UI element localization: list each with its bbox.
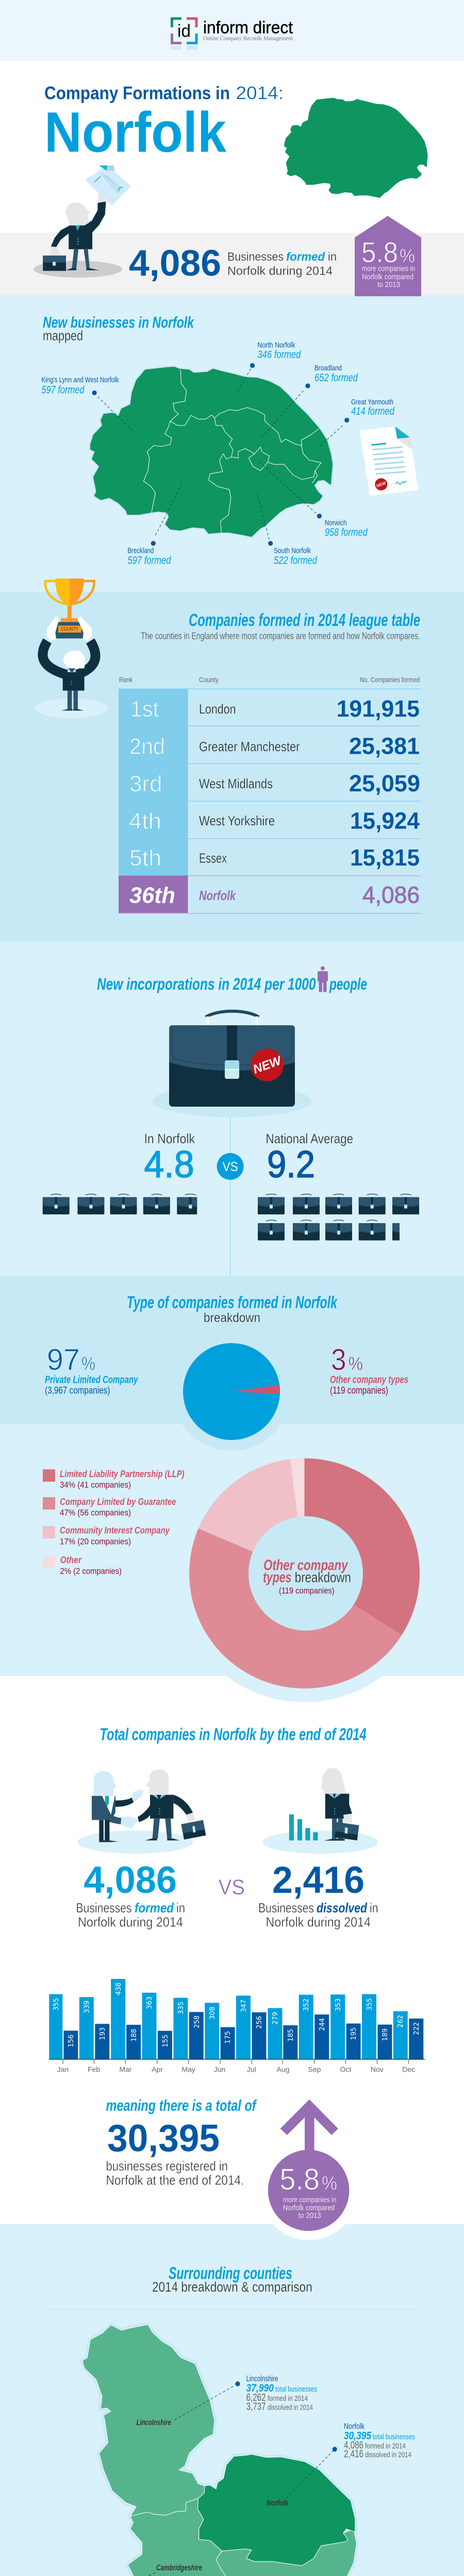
bar chart: monthly formed and dissolved: 352 [303, 1998, 310, 2011]
callout: 5.8% up arrow: 5.8 [279, 2163, 320, 2196]
bar chart: monthly formed and dissolved: 262 [397, 2015, 405, 2028]
heading: surrounding counties: 2014 breakdown & comparison [152, 2279, 312, 2295]
comparison: Norfolk vs national per 1000: In Norfolk [144, 1131, 195, 1146]
table: companies formed ranking: 1st [130, 697, 159, 722]
heading: total companies: Total companies in Norfolk by the end of 2014 [100, 1725, 367, 1743]
legend: other company types: 34% (41 companies) [60, 1480, 131, 1490]
bar chart: monthly formed and dissolved: 355 [366, 1998, 374, 2011]
heading: surrounding counties [41, 2263, 422, 2310]
bar chart: monthly formed and dissolved: 189 [382, 2028, 389, 2041]
heading: new incorporations per 1000 people [97, 967, 367, 993]
icon: large new briefcase [153, 1011, 311, 1276]
panel background: title [0, 61, 464, 233]
bar chart: monthly formed and dissolved: 256 [256, 2016, 263, 2029]
bar chart: monthly formed and dissolved: 244 [319, 2018, 326, 2031]
title block: Company Formations in [44, 83, 230, 104]
callout: 5.8% house: % [400, 245, 415, 266]
table: companies formed ranking: County [199, 675, 219, 684]
title block: 2014: [236, 83, 284, 104]
legend: other company types: Community Interest Company [60, 1526, 170, 1536]
heading: league table 1 [141, 611, 420, 641]
pie chart: company types [172, 1332, 291, 1451]
label: King's Lynn and West Norfolk: King's Lynn and West Norfolk [41, 376, 119, 384]
stat: total 30,395: meaning there is a total of [106, 2096, 257, 2114]
label: North Norfolk: North Norfolk [257, 342, 295, 350]
stat: 3% other types: Other company types [330, 1374, 408, 1385]
bar chart: monthly formed and dissolved: 353 [335, 1998, 342, 2011]
heading: new incorporations per 1000 people: people [329, 975, 367, 993]
callout: 5.8% house [355, 216, 421, 296]
stats: Norfolk: 30,395 [344, 2430, 371, 2442]
bar chart: monthly formed and dissolved: Jun [214, 2065, 225, 2074]
bar chart: monthly formed and dissolved: 188 [130, 2029, 138, 2042]
stat: formed versus dissolved: dissolved [317, 1900, 368, 1916]
bar chart: monthly formed and dissolved: 222 [413, 2022, 421, 2035]
panel background: header [0, 0, 464, 61]
bar chart: monthly formed and dissolved: Jul [247, 2065, 256, 2074]
table: companies formed ranking: West Midlands [199, 776, 273, 791]
legend: other company types: 47% (56 companies) [60, 1507, 131, 1518]
bar chart: monthly formed and dissolved: Dec [402, 2065, 415, 2074]
stat: formed versus dissolved: Businesses [76, 1900, 132, 1916]
bar chart: monthly formed and dissolved: Aug [277, 2065, 289, 2074]
stat: formed versus dissolved: in [370, 1900, 378, 1916]
stats: Lincolnshire: 37,990 [246, 2382, 274, 2394]
table: companies formed ranking: 36th [129, 883, 175, 908]
label: King's Lynn and West Norfolk [41, 376, 119, 396]
heading: type of companies: breakdown [204, 1311, 260, 1325]
panel background: surrounding counties [0, 2224, 464, 2576]
callout: 5.8% up arrow: more companies in [283, 2196, 337, 2204]
comparison: Norfolk vs national per 1000: 9.2 [267, 1144, 315, 1185]
stat: businesses formed: Norfolk during 2014 [227, 264, 333, 278]
bar chart: monthly formed and dissolved: 175 [224, 2031, 232, 2044]
callout: 5.8% house: Norfolk compared [362, 273, 413, 281]
label: South Norfolk [274, 547, 318, 566]
stat: formed versus dissolved: Businesses [258, 1900, 314, 1916]
callout: 5.8% house: to 2013 [377, 280, 400, 289]
table: companies formed ranking: West Yorkshire [199, 813, 275, 828]
comparison: Norfolk vs national per 1000: National Average [266, 1131, 353, 1146]
bar chart: monthly formed and dissolved: 355 [53, 1998, 60, 2011]
label: COUNTY plaque: COUNTY [61, 626, 78, 632]
stats: Lincolnshire [246, 2375, 317, 2412]
stat: businesses formed: 4,086 [129, 243, 221, 284]
legend: other company types: Other [60, 1555, 82, 1565]
stat: formed versus dissolved: 2,416 [272, 1859, 364, 1901]
icon: new document [359, 427, 418, 496]
table: companies formed ranking: 3rd [129, 771, 162, 796]
stat: 3% other types [330, 1343, 408, 1396]
legend: other company types: 2% (2 companies) [60, 1566, 122, 1576]
illustration: man with falling bar chart [263, 1768, 378, 1854]
bar chart: monthly formed and dissolved: 258 [193, 2015, 201, 2028]
stat: 97% private limited: 97 [47, 1343, 80, 1377]
label: Norwich: Norwich [325, 519, 347, 528]
map: Norfolk outline [284, 98, 428, 198]
label: Broadland: 652 formed [314, 372, 358, 384]
legend: other company types: Limited Liability Partnership (LLP) [60, 1469, 185, 1479]
heading: type of companies [127, 1293, 338, 1325]
illustration: man holding county trophy [35, 579, 108, 718]
stats: Lincolnshire: formed in 2014 [268, 2394, 308, 2403]
label: Great Yarmouth [351, 398, 395, 417]
bar chart: monthly formed and dissolved: 438 [115, 1982, 123, 1995]
stats: Lincolnshire: 3,737 [246, 2401, 266, 2412]
callout: 5.8% up arrow: to 2013 [299, 2211, 321, 2220]
table: companies formed ranking: Rank [119, 675, 133, 684]
stat: businesses formed: formed [286, 250, 325, 263]
title block: Norfolk [44, 101, 227, 164]
table: companies formed ranking: 25,059 [349, 770, 420, 796]
bar chart: monthly formed and dissolved: 363 [146, 1996, 154, 2009]
legend: other company types: Company Limited by Guarantee [60, 1497, 176, 1507]
stat: formed versus dissolved: 4,086 [84, 1859, 177, 1901]
callout: 5.8% house: more companies in [362, 264, 415, 273]
bar chart: monthly formed and dissolved: 279 [272, 2012, 279, 2025]
heading: surrounding counties: Surrounding counties [169, 2263, 292, 2282]
pictogram: national 9.2 briefcases [258, 1194, 419, 1241]
stat: formed versus dissolved: Norfolk during 2014 [78, 1914, 183, 1929]
comparison: Norfolk vs national per 1000 [144, 1131, 353, 1185]
stat: 97% private limited: Private Limited Company [45, 1374, 138, 1385]
stats: Lincolnshire: Lincolnshire [246, 2375, 278, 2383]
stat: total 30,395: 30,395 [107, 2116, 220, 2159]
panel background: headline band [0, 233, 464, 295]
callout: 5.8% up arrow: Norfolk compared [283, 2204, 335, 2212]
donut chart: other company types breakdown [175, 1445, 433, 1702]
bar chart: monthly formed and dissolved: 347 [240, 1999, 248, 2012]
bar chart: monthly formed and dissolved: Sep [308, 2065, 321, 2074]
callout: 5.8% house: 5.8 [361, 236, 398, 268]
callout: 5.8% up arrow: % [322, 2173, 337, 2194]
panel background: total companies [0, 1676, 464, 2224]
heading: new businesses mapped [43, 313, 194, 343]
stat: businesses formed [129, 243, 337, 284]
stat: formed versus dissolved: in [176, 1900, 185, 1916]
comparison: Norfolk vs national per 1000: VS [223, 1160, 238, 1174]
stat: businesses formed: Businesses [227, 250, 284, 263]
stat: total 30,395: Norfolk at the end of 2014. [106, 2173, 244, 2188]
table: companies formed ranking: Essex [199, 850, 227, 866]
illustration: man holding up document [34, 165, 131, 278]
table: companies formed ranking: No. Companies formed [360, 675, 420, 684]
stats: Norfolk: total businesses [373, 2433, 415, 2442]
stats: Norfolk: 2,416 [344, 2449, 363, 2460]
stats: Lincolnshire: total businesses [275, 2385, 317, 2394]
label: Great Yarmouth: 414 formed [351, 405, 395, 417]
panel background: other types breakdown [0, 1424, 464, 1676]
logo: inform direct header: id [177, 22, 191, 41]
legend: other company types: 17% (20 companies) [60, 1536, 131, 1546]
illustration: two men shaking hands [77, 1770, 206, 1854]
stat: 97% private limited: (3,967 companies) [45, 1385, 110, 1396]
map labels: county names [137, 2418, 297, 2576]
stat: formed versus dissolved: Norfolk during 2014 [266, 1914, 371, 1929]
heading: new businesses mapped: mapped [43, 328, 83, 343]
table: companies formed ranking: Greater Manchester [199, 739, 300, 754]
stat: 3% other types: (119 companies) [330, 1385, 388, 1396]
bar chart: monthly formed and dissolved: Oct [340, 2065, 351, 2074]
table: companies formed ranking: 5th [129, 845, 161, 871]
table: companies formed ranking: 2nd [129, 734, 165, 759]
stat: formed versus dissolved: VS [219, 1875, 245, 1899]
comparison: Norfolk vs national per 1000: 4.8 [144, 1144, 194, 1185]
badge text: NEW: NEW [376, 481, 387, 488]
donut chart: other company types breakdown: types [263, 1569, 291, 1586]
stat: 3% other types: 3 [331, 1343, 346, 1377]
table: companies formed ranking: 15,924 [350, 807, 420, 834]
stats: Norfolk: formed in 2014 [365, 2442, 406, 2450]
donut chart: other company types breakdown: breakdown [295, 1569, 351, 1585]
stats: Norfolk: dissolved in 2014 [365, 2451, 411, 2460]
bar chart: monthly formed and dissolved: 185 [287, 2029, 295, 2042]
stat: formed versus dissolved [76, 1859, 378, 1929]
donut chart: other company types breakdown: Other company [263, 1557, 349, 1574]
map: surrounding counties [82, 2325, 357, 2576]
bar chart: monthly formed and dissolved: Jan [57, 2065, 69, 2074]
label: Broadland [314, 364, 358, 384]
map labels: county names: Norfolk [267, 2499, 289, 2508]
stat: 97% private limited: % [81, 1353, 95, 1374]
table: companies formed ranking: 191,915 [337, 696, 420, 722]
label: North Norfolk: 346 formed [257, 349, 301, 361]
donut chart: other company types breakdown: (119 companies) [279, 1586, 335, 1596]
label: Breckland: 597 formed [127, 554, 171, 566]
map labels: county names: Cambridgeshire [156, 2564, 202, 2572]
bar chart: monthly formed and dissolved: 193 [99, 2027, 107, 2040]
stats: Norfolk: 4,086 [344, 2440, 363, 2451]
bar chart: monthly formed and dissolved: May [181, 2065, 195, 2074]
stat: total 30,395 [106, 2096, 257, 2188]
stats: Norfolk [344, 2422, 415, 2460]
bar chart: monthly formed and dissolved: Mar [119, 2065, 132, 2074]
label: Broadland: Broadland [314, 364, 342, 372]
label: King's Lynn and West Norfolk: 597 formed [41, 384, 85, 396]
bar chart: monthly formed and dissolved: 155 [162, 2035, 170, 2047]
stat: formed versus dissolved: formed [135, 1900, 174, 1916]
title block [44, 83, 284, 164]
bar chart: monthly formed and dissolved: Apr [152, 2065, 163, 2074]
bar chart: monthly formed and dissolved: Feb [88, 2065, 100, 2074]
table: companies formed ranking: London [199, 701, 236, 717]
table: companies formed ranking: 25,381 [349, 733, 420, 759]
label: North Norfolk [257, 342, 301, 361]
bar chart: monthly formed and dissolved: 195 [350, 2027, 358, 2040]
bar chart: monthly formed and dissolved: 308 [209, 2007, 217, 2020]
heading: type of companies: Type of companies formed in Norfolk [127, 1293, 338, 1312]
logo: inform direct header [171, 18, 293, 50]
panel background: company types [0, 1276, 464, 1424]
label: South Norfolk: South Norfolk [274, 547, 311, 555]
table: companies formed ranking [119, 675, 421, 914]
bar chart: monthly formed and dissolved: 339 [84, 2001, 91, 2013]
table: companies formed ranking: 15,815 [350, 844, 420, 871]
bar chart: monthly formed and dissolved: 156 [68, 2035, 75, 2047]
panel background: district map [0, 295, 464, 592]
logo: inform direct header: Online Company Records Management [203, 36, 293, 42]
stat: 3% other types: % [349, 1353, 363, 1374]
label: Breckland [127, 547, 171, 566]
stat: businesses formed: in [328, 250, 337, 263]
stat: total 30,395: businesses registered in [106, 2158, 228, 2174]
heading: new incorporations per 1000 people: New incorporations in 2014 per 1000 [97, 975, 316, 993]
label: Norwich: 958 formed [325, 527, 368, 538]
stats: Norfolk: Norfolk [344, 2422, 365, 2431]
stat: 97% private limited [45, 1343, 138, 1396]
table: companies formed ranking: 4,086 [362, 882, 420, 908]
bar chart: monthly formed and dissolved: 335 [177, 2002, 185, 2014]
logo: inform direct header: inform direct [203, 18, 293, 37]
table: companies formed ranking: Norfolk [199, 888, 236, 903]
label: Norwich [325, 519, 368, 538]
panel background: league table 1 [0, 592, 464, 942]
bar chart: monthly formed and dissolved: Nov [371, 2065, 384, 2074]
label: South Norfolk: 522 formed [274, 554, 318, 566]
label: Great Yarmouth: Great Yarmouth [351, 398, 393, 406]
heading: new businesses mapped: New businesses in Norfolk [43, 313, 194, 331]
bar chart: monthly formed and dissolved [49, 1979, 425, 2074]
map: Norfolk districts [90, 363, 349, 546]
panel background: incorporations per 1000 [0, 942, 464, 1276]
callout: 5.8% up arrow [259, 2099, 358, 2240]
legend: other company types [43, 1469, 185, 1576]
icon: large new briefcase: NEW [251, 1053, 284, 1077]
stats: Lincolnshire: dissolved in 2014 [268, 2403, 313, 2412]
pictogram: Norfolk 4.8 briefcases [43, 1194, 204, 1214]
label: Breckland: Breckland [127, 547, 154, 555]
stats: Lincolnshire: 6,262 [246, 2392, 266, 2403]
table: companies formed ranking: 4th [129, 808, 161, 834]
map labels: county names: Lincolnshire [137, 2418, 171, 2427]
